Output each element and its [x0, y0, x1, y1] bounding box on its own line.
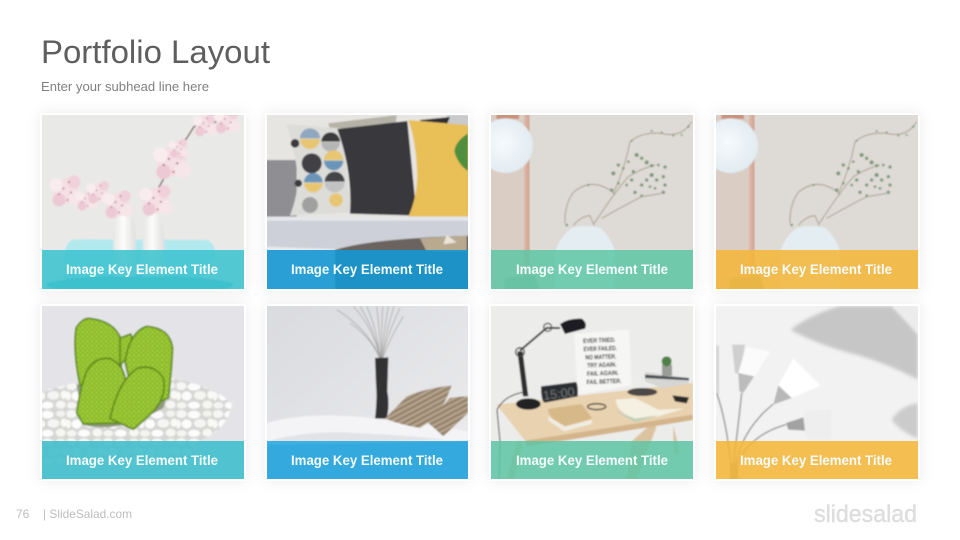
panel: card 2 cushions — [264, 112, 472, 292]
panel: card 4 bulb and branch — [712, 112, 922, 292]
panel: card 6 sofa and tall vase — [264, 302, 472, 482]
poster lines — [583, 337, 622, 386]
colour band — [42, 441, 244, 479]
page number: 76 — [16, 507, 30, 521]
poster lines: FAIL AGAIN. — [587, 370, 619, 378]
label: Image Key Element Title — [516, 262, 668, 277]
label: Image Key Element Title — [740, 453, 892, 468]
panel: card 3 bulb and branch — [488, 112, 696, 292]
footer text: | SlideSalad.com — [43, 507, 132, 521]
panel: card 8 floor lamp — [712, 302, 922, 482]
colour band — [716, 250, 918, 289]
photo: white vases with blossoms — [42, 115, 244, 289]
label: Image Key Element Title — [516, 453, 668, 468]
colour band — [491, 441, 693, 479]
colour band — [491, 250, 693, 289]
title: Portfolio Layout — [41, 34, 270, 70]
label: Image Key Element Title — [291, 262, 443, 277]
colour band — [267, 250, 468, 289]
clock digits: 15:00 — [542, 385, 575, 403]
logo wordmark: slidesalad — [814, 501, 917, 528]
photo: sofa with cushions — [267, 115, 468, 289]
photo: bulb lamp and branch vase — [491, 115, 693, 289]
panel: card 7 desk — [488, 302, 696, 482]
subhead: Enter your subhead line here — [41, 79, 209, 94]
poster lines: FAIL BETTER. — [586, 378, 622, 386]
panel: card 1 vases — [38, 112, 248, 292]
photo: white floor lamp with wall shadows — [716, 306, 918, 479]
poster lines: NO MATTER. — [585, 353, 617, 362]
photo: white sofa, tall vase, striped cushions — [267, 306, 468, 479]
poster lines: EVER FAILED. — [583, 345, 617, 353]
label: Image Key Element Title — [291, 453, 443, 468]
label: Image Key Element Title — [66, 262, 218, 277]
colour band — [42, 250, 244, 289]
colour band — [716, 441, 918, 479]
photo: bulb lamp and branch vase — [716, 115, 918, 289]
colour band — [267, 441, 468, 479]
panel: card 5 cactus — [38, 302, 248, 482]
photo: cactus in white pebbles — [42, 306, 244, 441]
label: Image Key Element Title — [66, 453, 218, 468]
poster lines: TRY AGAIN. — [587, 361, 617, 370]
photo: wooden desk with lamp and poster — [491, 306, 693, 479]
label: Image Key Element Title — [740, 262, 892, 277]
poster lines: EVER TRIED. — [583, 337, 616, 345]
